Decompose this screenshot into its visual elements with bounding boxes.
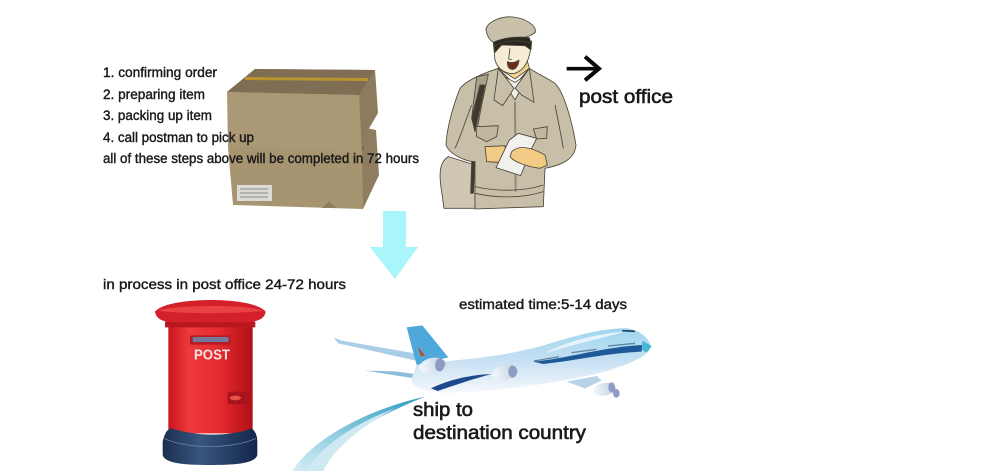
- icon: airplane: [292, 325, 652, 471]
- label: post office: post office: [579, 87, 673, 108]
- steps text block: 2. preparing item: [103, 87, 205, 102]
- windows: [534, 343, 635, 361]
- icon: postman: [440, 17, 576, 209]
- nose: [642, 341, 652, 353]
- arrow: to post office: [567, 57, 599, 80]
- icon: stacked cardboard boxes: [227, 69, 379, 209]
- steps text block: 3. packing up item: [103, 108, 212, 123]
- engines: [418, 355, 447, 376]
- steps text block: 4. call postman to pick up: [103, 130, 254, 145]
- fuselage stripe: [533, 345, 642, 364]
- shipping label: [237, 185, 272, 201]
- hat: [486, 17, 535, 42]
- satchel: [440, 157, 475, 208]
- steps text block: 1. confirming order: [103, 65, 217, 80]
- heading: post office processing time: in process in post office 24-72 hours: [103, 276, 346, 292]
- face: [493, 43, 531, 74]
- label: estimated time: estimated time:5-14 days: [459, 297, 627, 312]
- sleeves: [455, 105, 472, 148]
- icon: red post box: [155, 300, 266, 465]
- near tail plane: [365, 371, 435, 380]
- label: POST: POST: [194, 347, 230, 363]
- tail fin: [407, 325, 448, 365]
- shirt: [498, 73, 529, 100]
- steps text block: [103, 65, 419, 166]
- arrow: cyan down: [370, 211, 418, 279]
- strap: [472, 74, 488, 132]
- fuselage: [411, 328, 651, 393]
- right hand: [510, 148, 547, 168]
- label: ship to destination country: destination country: [413, 423, 587, 444]
- pockets and zip: [476, 126, 498, 142]
- far wing: [333, 337, 433, 363]
- label: ship to destination country: [413, 400, 587, 444]
- neck: [498, 58, 529, 79]
- near wing: [567, 376, 602, 388]
- steps text block: all of these steps above will be completed in 72 hours: [103, 151, 419, 166]
- collar: [494, 68, 514, 106]
- jacket: [446, 68, 576, 209]
- label: ship to destination country: ship to: [413, 400, 473, 421]
- left hand: [485, 146, 506, 162]
- swoosh trail: [292, 397, 425, 471]
- upper highlight: [545, 332, 625, 353]
- notepad: [496, 133, 537, 176]
